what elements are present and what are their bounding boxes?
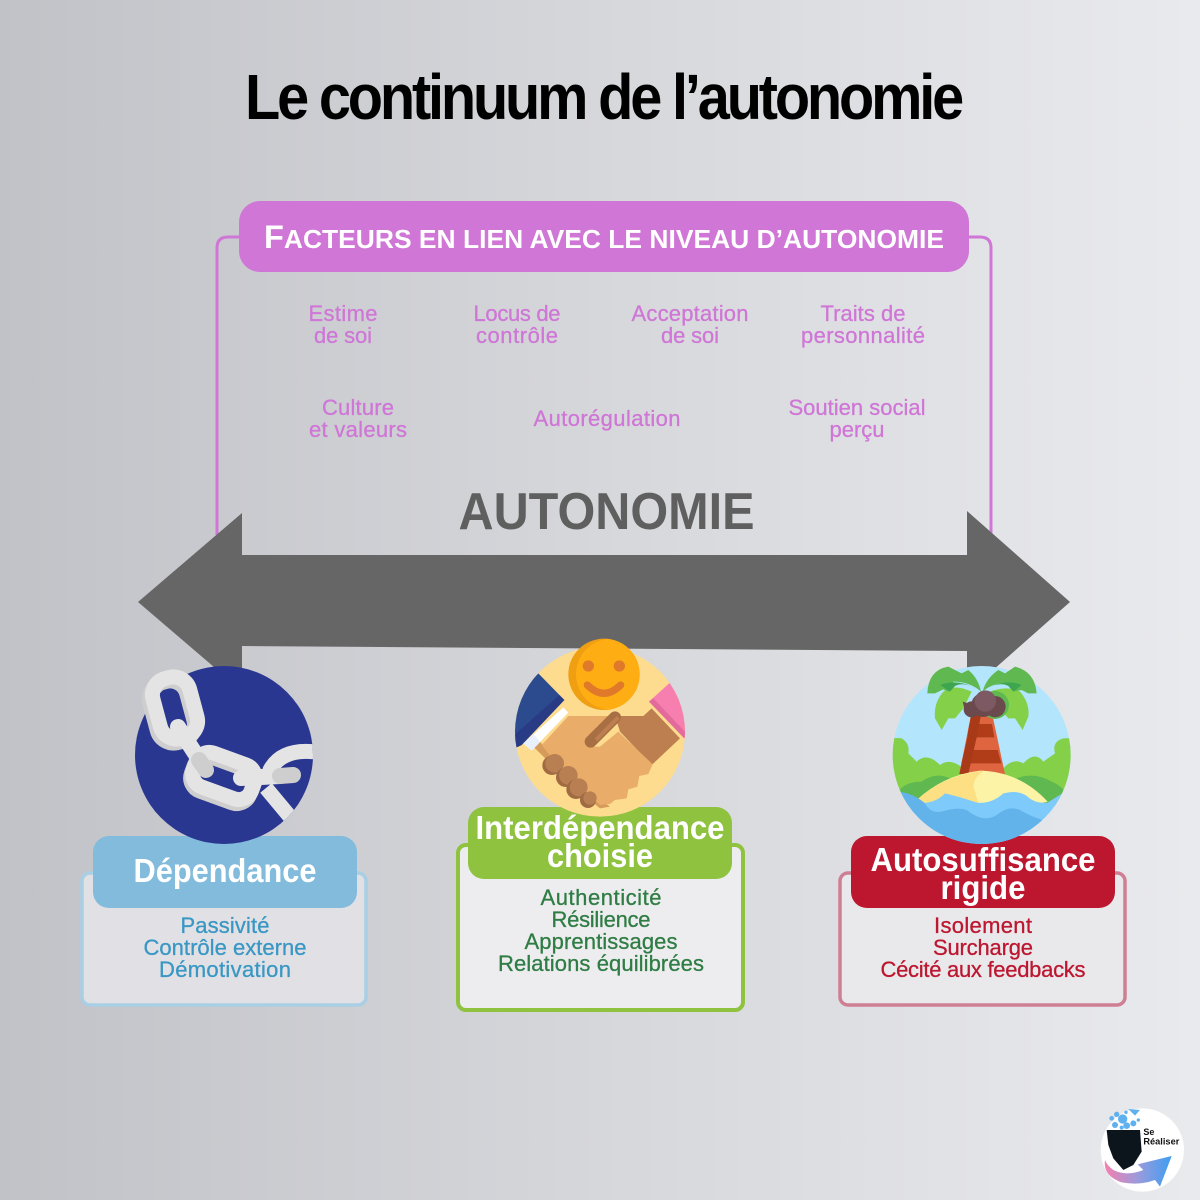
factor: estime de soi: Estime — [308, 301, 378, 326]
factor: acceptation de soi: de soi — [661, 323, 719, 348]
logo: Se Réaliser: Réaliser — [1143, 1136, 1180, 1146]
axis label: AUTONOMIE — [458, 483, 754, 541]
factor: locus de contrôle: Locus de — [474, 301, 560, 326]
factor: soutien social perçu: Soutien social — [788, 395, 926, 420]
panel: autosuffisance rigide: Autosuffisance — [870, 841, 1096, 878]
panel: dépendance: Passivité — [180, 913, 270, 938]
panel: facteurs — [217, 201, 991, 535]
factor: autorégulation: Autorégulation — [534, 406, 680, 431]
panel: interdépendance choisie: Apprentissages — [524, 929, 678, 954]
factor: locus de contrôle: contrôle — [476, 323, 558, 348]
panel: autosuffisance rigide — [840, 836, 1125, 1005]
panel: autosuffisance rigide: rigide — [940, 869, 1026, 906]
panel: dépendance — [82, 836, 366, 1005]
factor: acceptation de soi: Acceptation — [632, 301, 748, 326]
panel outline: facteurs — [217, 237, 991, 535]
title: Le continuum de l’autonomie — [245, 61, 963, 133]
factor: culture et valeurs: Culture — [322, 395, 394, 420]
factor: culture et valeurs: et valeurs — [309, 417, 407, 442]
panel: interdépendance choisie: choisie — [547, 837, 653, 874]
panel: interdépendance choisie: Résilience — [552, 907, 650, 932]
panel: dépendance: Dépendance — [134, 852, 316, 889]
heading: facteurs: FACTEURS EN LIEN AVEC LE NIVEAU D’AUTONOMIE — [264, 219, 944, 255]
logo: Se Réaliser — [1101, 1108, 1184, 1192]
factor: estime de soi: de soi — [314, 323, 372, 348]
factor: traits de personnalité: Traits de — [820, 301, 906, 326]
icon: handshake with smiley — [510, 639, 690, 817]
panel: dépendance: Démotivation — [159, 957, 291, 982]
logo: Se Réaliser: Se — [1143, 1127, 1154, 1137]
panel: dépendance: Contrôle externe — [144, 935, 306, 960]
arrow: double-headed autonomy axis — [138, 511, 1070, 693]
factor: traits de personnalité: personnalité — [801, 323, 925, 348]
icon: palm tree island — [890, 666, 1077, 850]
icon: broken chain — [135, 666, 316, 844]
panel: autosuffisance rigide: Cécité aux feedbacks — [880, 957, 1086, 982]
panel: interdépendance choisie — [458, 807, 743, 1010]
panel: interdépendance choisie: Authenticité — [540, 885, 662, 910]
heading: facteurs — [239, 201, 969, 272]
panel: interdépendance choisie: Relations équilibrées — [498, 951, 704, 976]
factor: soutien social perçu: perçu — [830, 417, 884, 442]
panel: interdépendance choisie: Interdépendance — [476, 809, 724, 846]
panel: autosuffisance rigide: Surcharge — [933, 935, 1033, 960]
panel: autosuffisance rigide: Isolement — [934, 913, 1032, 938]
